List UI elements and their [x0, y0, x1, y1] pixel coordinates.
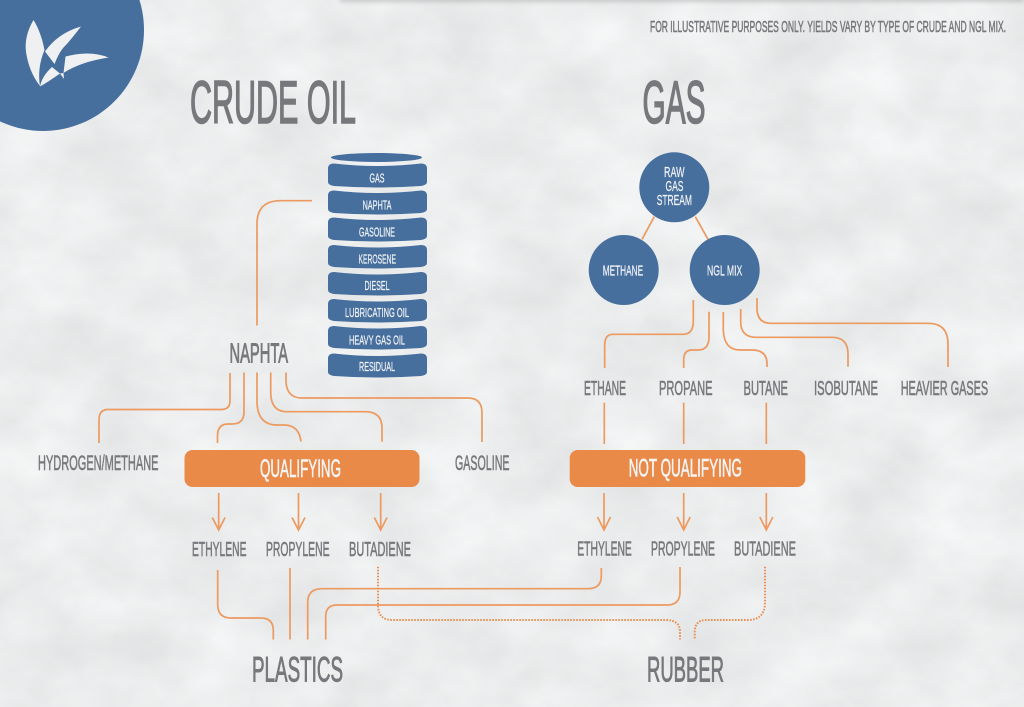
band: diesel: DIESEL: [364, 278, 390, 293]
label: butadiene right: BUTADIENE: [734, 538, 796, 560]
label: ethane: ETHANE: [584, 378, 626, 400]
circle: methane: [589, 235, 659, 305]
label: rubber: RUBBER: [647, 650, 724, 690]
band: kerosene: KEROSENE: [358, 252, 396, 266]
arrows: not qualifying to products: [598, 493, 773, 530]
connectors: naphta outputs: [99, 372, 482, 443]
label: gasoline: GASOLINE: [455, 452, 510, 475]
circle: raw gas stream: GAS: [666, 178, 684, 195]
label: isobutane: ISOBUTANE: [814, 378, 878, 400]
bar: not qualifying: [570, 450, 805, 487]
band: residual: [328, 354, 427, 378]
band: heavy gas oil: [328, 326, 427, 350]
label: propylene left: PROPYLENE: [266, 539, 330, 561]
label: ethylene right: ETHYLENE: [577, 538, 632, 560]
band: naphta: NAPHTA: [362, 198, 392, 212]
bar: qualifying: QUALIFYING: [260, 455, 341, 483]
band: lubricating oil: [328, 299, 427, 322]
band: kerosene: [328, 245, 427, 268]
label: plastics: PLASTICS: [252, 650, 343, 690]
circle: methane: METHANE: [603, 262, 643, 280]
heading: crude oil: CRUDE OIL: [190, 69, 356, 136]
connectors: to plastics: [218, 567, 680, 640]
band: gasoline: [328, 218, 427, 242]
connectors: gas products to bar: [604, 403, 766, 444]
logo badge: [0, 0, 144, 131]
connectors: raw gas to children: [642, 217, 708, 239]
connectors: ngl mix outputs: [605, 298, 948, 368]
bar: not qualifying: NOT QUALIFYING: [629, 454, 742, 482]
band: diesel: [328, 272, 427, 296]
band: heavy gas oil: HEAVY GAS OIL: [349, 332, 405, 348]
label: ethylene left: ETHYLENE: [192, 539, 246, 561]
band: naphta: [328, 190, 427, 214]
circle: raw gas stream: STREAM: [657, 192, 692, 209]
band: gas: [328, 164, 427, 188]
circle: ngl mix: [690, 235, 760, 305]
connector: naphta band to naphta label: [257, 201, 312, 326]
circle: raw gas stream: [639, 152, 709, 222]
text: GAS: [642, 69, 706, 136]
label: propylene right: PROPYLENE: [651, 538, 715, 560]
band: lubricating oil: LUBRICATING OIL: [345, 305, 409, 320]
band: residual: RESIDUAL: [359, 359, 395, 374]
icon: logo leaves: [26, 20, 108, 86]
label: hydrogen/methane: HYDROGEN/METHANE: [38, 452, 158, 475]
crude oil barrel stack: [328, 153, 427, 378]
label: naphta: NAPHTA: [230, 338, 288, 368]
bar: qualifying: [184, 450, 420, 487]
label: butane: BUTANE: [744, 378, 788, 400]
connectors: to rubber: [378, 567, 765, 640]
band: gasoline: GASOLINE: [359, 224, 395, 240]
label: propane: PROPANE: [659, 378, 712, 400]
arrows: qualifying to products: [212, 493, 387, 530]
label: butadiene left: BUTADIENE: [349, 539, 411, 561]
band: gas: GAS: [370, 170, 385, 186]
circle: ngl mix: NGL MIX: [707, 262, 742, 280]
circle: raw gas stream: RAW: [664, 164, 685, 181]
